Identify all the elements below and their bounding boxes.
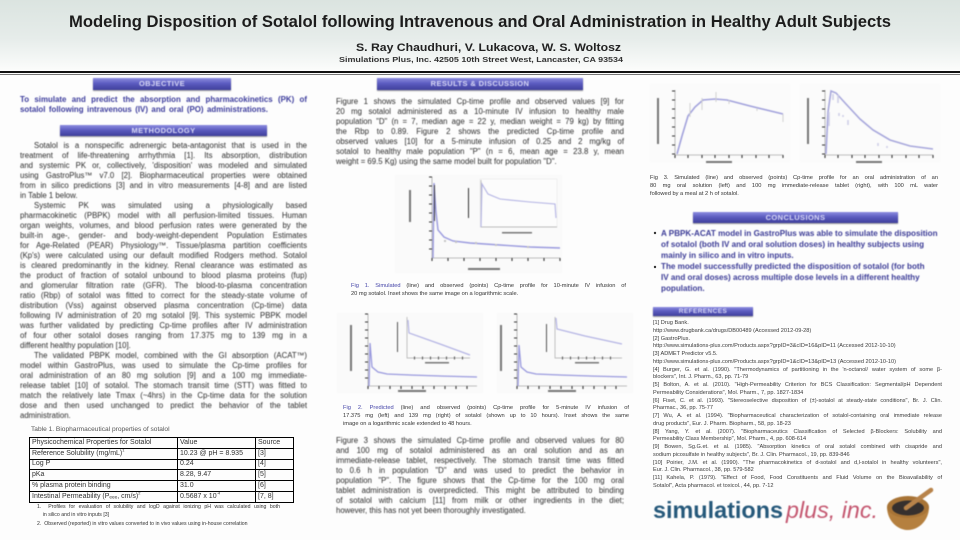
results text 1: population "D" (n = 7, median age = 22 y, median weight = 79 kg) by fitting <box>336 117 624 126</box>
heading: results and discussion: RESULTS & DISCUSSION <box>431 79 529 88</box>
table: physicochemical properties: % plasma protein binding <box>32 482 111 489</box>
methodology text: of four other sotalol doses ranging from 17.375 mg to 139 mg in a <box>20 331 307 340</box>
references list: [11] Kahela, P. (1979). "Effect of Food, Food Constituents and Fluid Volume on the Bioavailability of <box>653 475 942 481</box>
references list: [2] GastroPlus. <box>653 336 690 342</box>
figure 3 caption: followed by a meal at 2 h of sotalol. <box>650 191 739 197</box>
objective text: To simulate and predict the absorption and pharmacokinetics (PK) of <box>20 95 307 104</box>
objective text: sotalol following intravenous (IV) and oral (PO) administrations. <box>20 105 268 114</box>
methodology text: dose and then used unchanged to predict the behavior of the tablet <box>20 401 307 410</box>
references list: http://www.drugbank.ca/drugs/DB00489 (Accessed 2012-09-28) <box>653 328 811 334</box>
figure 1 caption: Fig 1. Simulated (line) and observed (points) Cp-time profile for 10-minute IV infusion of <box>351 283 626 289</box>
references list: [1] Drug Bank. <box>653 320 689 326</box>
references list: [10] Poirier, J.M. et al. (1990). "The pharmacokinetics of d-sotalol and d,l-sotalol in healthy volunteers", <box>653 460 942 466</box>
table: physicochemical properties: Value <box>180 439 197 446</box>
methodology text: organ weights, volumes, and blood perfusion rates were generated by the <box>20 221 307 230</box>
figure 3 caption <box>650 175 938 197</box>
table: physicochemical properties: Source <box>258 439 280 446</box>
methodology text: using GastroPlus™ v7.0 [2]. Biopharmaceutical properties were obtained <box>20 171 307 180</box>
references list: http://www.simulations-plus.com/Products.aspx?grpID=3&cID=16&pID=11 (Accessed 2012-10-10) <box>653 343 896 349</box>
references list: Permeability Class Membership", Mol. Pharm., 4, pp. 608-614 <box>653 436 806 442</box>
methodology text: and glomerular filtration rate (GFR). The blood-to-plasma concentration <box>20 281 307 290</box>
results text 2: tablet administration is overpredicted. This might be attributed to binding <box>336 486 624 495</box>
methodology text: is cleared predominantly in the kidney. Renal clearance was estimated as <box>20 261 307 270</box>
table: physicochemical properties: 31.0 <box>180 482 194 489</box>
results text 1: observed values [10] for a 5-minute infusion of 0.25 and 2 mg/kg of <box>336 137 624 146</box>
methodology text: Sotalol is a nonspecific adrenergic beta-antagonist that is used in the <box>34 141 307 150</box>
table caption: Table 1. Biopharmaceutical properties of sotalol <box>31 426 170 433</box>
methodology text: from in silico predictions [3] and in vitro measurements [4-8] and are listed <box>20 181 307 190</box>
figure 2 caption: Fig 2. Predicted (line) and observed (points) Cp-time profile for 5-minute IV infusion of <box>343 405 629 411</box>
references list: Permeability Considerations", Mol. Pharm., 7, pp. 1827-1834 <box>653 390 803 396</box>
results text 2: population "P". The figure shows that the Cp-time for the 100 mg oral <box>336 476 624 485</box>
results text 2 <box>336 436 624 516</box>
heading: objective <box>93 78 231 90</box>
heading: objective: OBJECTIVE <box>139 79 185 88</box>
table: physicochemical properties <box>29 437 294 503</box>
methodology text <box>19 141 308 420</box>
figure 3 caption: 80 mg oral solution (left) and 100 mg immediate-release tablet (right), with 100 mL water <box>650 183 938 189</box>
methodology text: model within GastroPlus, was used to simulate the Cp-time profiles for <box>20 361 307 370</box>
conclusions bullets: of sotalol (both IV and oral solution doses) in healthy subjects using <box>661 240 924 249</box>
references list: sodium picosulfate in healthy subjects", Br. J. Clin. Pharmacol., 19, pp. 839-846 <box>653 452 850 458</box>
header text <box>69 13 891 64</box>
references list: [7] Wu, A. et al. (1994). "Biopharmaceutical characterization of sotalol-containing oral immediate release <box>653 413 942 419</box>
heading: references: REFERENCES <box>679 308 727 315</box>
conclusions bullets: The model successfully predicted the disposition of sotalol (for both <box>661 262 925 271</box>
references list: Eur. J. Clin. Pharmacol., 38, pp. 579-582 <box>653 467 754 473</box>
references list: [9] Bowen, Sg.G.et. et al. (1985). "Absorption kinetics of oral sotalol combined with cisapride and <box>653 444 942 450</box>
table: physicochemical properties: [6] <box>258 482 266 489</box>
conclusions bullets: population. <box>661 284 705 293</box>
methodology text: treatment of life-threatening arrhythmia [1]. Its absorption, distribution <box>20 151 307 160</box>
methodology text: in Table 1 below. <box>20 191 78 200</box>
results text 1: weight = 69.5 Kg) using the same model built for population "D". <box>336 157 557 166</box>
references list: Pharmac., 36, pp. 75-77 <box>653 405 713 411</box>
heading: references <box>653 307 753 316</box>
methodology text: ratio (Rbp) of sotalol was fitted to correct for the steady-state volume of <box>20 291 307 300</box>
heading: conclusions: CONCLUSIONS <box>766 213 825 222</box>
results text 1: the Rbp to 0.89. Figure 2 shows the predicted Cp-time profile and <box>336 127 624 136</box>
figure 3 caption: Fig 3. Simulated (line) and observed (points) Cp-time profile for an oral administration of an <box>650 175 938 181</box>
table: physicochemical properties: Physicochemical Properties for Sotalol <box>32 439 151 446</box>
figure 2 caption <box>343 405 629 427</box>
table: physicochemical properties: [3] <box>258 450 266 457</box>
results text 1: sotalol to healthy male population "P" (n = 6, mean age = 23.8 y, mean <box>336 147 624 156</box>
conclusions bullets: IV and oral doses) across multiple dose levels in a different healthy <box>661 273 920 282</box>
icon: mortar and pestle <box>887 490 931 530</box>
table: physicochemical properties: [7, 8] <box>258 493 274 500</box>
references list <box>653 320 942 489</box>
references list: [6] Fiset, C. et al. (1993). "Stereoselective disposition of (±)-sotalol at steady-state conditions", Br. J. Clin. <box>653 398 942 404</box>
references list: [5] Bolton, A. et al. (2010). "High-Permeability Criterion for BCS Classification: Segmental/pH Dependent <box>653 382 942 388</box>
references list: http://www.simulations-plus.com/Products.aspx?grpID=1&cID=13&pID=13 (Accessed 2012-10-10) <box>653 359 896 365</box>
figure 1 caption <box>351 283 626 297</box>
methodology text: was further validated by predicting Cp-time profiles after IV administration <box>20 321 307 330</box>
references list: Sotalol", Acta pharmacol. et toxicol., 44, pp. 7-12 <box>653 483 773 489</box>
header band <box>0 0 960 70</box>
heading: methodology: METHODOLOGY <box>132 126 195 135</box>
heading: results and discussion <box>377 78 583 90</box>
header rule <box>0 71 960 75</box>
references list: [3] ADMET Predictor v5.5. <box>653 351 718 357</box>
heading: methodology <box>60 125 267 136</box>
table: physicochemical properties: pKa <box>32 471 44 478</box>
affiliation: Simulations Plus, Inc. 42505 10th Street West, Lancaster, CA 93534 <box>339 55 623 64</box>
table: physicochemical properties: [5] <box>258 471 266 478</box>
figure 1 caption: 20 mg sotalol. Inset shows the same image on a logarithmic scale. <box>351 291 518 297</box>
objective text <box>20 95 308 114</box>
references list: [4] Burger, G. et al. (1990). "Thermodynamics of partitioning in the 'n-octanol/ water system of some β- <box>653 366 942 372</box>
methodology text: administration. <box>20 411 71 420</box>
references list: drug products", Eur. J. Pharm. Biopharm., 58, pp. 18-23 <box>653 421 791 427</box>
results text 2: to 0.6 h in population "D" and was used to predict the behavior in <box>336 466 624 475</box>
methodology text: built-in age-, gender- and body-weight-dependent Population Estimates <box>20 231 307 240</box>
results text 1: 20 mg sotalol administered as a 10-minute IV infusion to healthy male <box>336 107 624 116</box>
results text 1: Figure 1 shows the simulated Cp-time profile and observed values [9] for <box>336 97 624 106</box>
table footnotes: 1. Profiles for evaluation of solubility and logD against ionizing pH was calculated using both <box>37 504 280 510</box>
table: physicochemical properties: 8.28, 9.47 <box>180 471 211 478</box>
methodology text: the product of fraction of sotalol unbound to blood plasma proteins (fup) <box>20 271 307 280</box>
authors: S. Ray Chaudhuri, V. Lukacova, W. S. Woltosz <box>356 42 622 54</box>
methodology text: match the relatively late Tmax (~4hrs) in the Cp-time data for the solution <box>20 391 307 400</box>
methodology text: release tablet [10] of sotalol. The stomach transit time (STT) was fitted to <box>20 381 307 390</box>
table: physicochemical properties: Log P <box>32 460 50 467</box>
figure 2 caption: image on a logarithmic scale extended to 48 hours. <box>343 421 472 427</box>
methodology text: for Age-Related (PEAR) Physiology™. Tissue/plasma partition coefficients <box>20 241 307 250</box>
methodology text: (Kp's) were calculated using our default modified Rodgers method. Sotalol <box>20 251 307 260</box>
conclusions bullets <box>660 229 938 294</box>
methodology text: following IV administration of 20 mg sotalol [9]. This systemic PBPK model <box>20 311 307 320</box>
methodology text: pharmacokinetic (PBPK) model with all perfusion-limited tissues. Human <box>20 211 307 220</box>
table footnotes <box>37 504 280 527</box>
methodology text: The validated PBPK model, combined with the GI absorption (ACAT™) <box>34 351 307 360</box>
results text 2: and 100 mg of sotalol administered as an oral solution and as an <box>336 446 624 455</box>
conclusions bullets: A PBPK-ACAT model in GastroPlus was able to simulate the disposition <box>661 229 938 238</box>
logo: simulations plus: plus, inc. <box>785 497 878 523</box>
results text 2: immediate-release tablet, respectively. The stomach transit time was fitted <box>336 456 624 465</box>
methodology text: Systemic PK was simulated using a physiologically based <box>34 201 307 210</box>
table: physicochemical properties: [4] <box>258 460 266 467</box>
references list: blockers", Int. J. Pharm., 63, pp. 71-79 <box>653 374 748 380</box>
table footnotes: 2. Observed (reported) in vitro values converted to in vivo values using in-house correlation <box>37 521 248 527</box>
conclusions bullets: mainly in silico and in vitro inputs. <box>661 251 794 260</box>
references list: [8] Yang, Y. et al. (2007). "Biopharmaceutics Classification of Selected β-Blockers: Solubility and <box>653 428 942 434</box>
results text 2: Figure 3 shows the simulated Cp-time profile and observed values for 80 <box>336 436 624 445</box>
results text 2: of sotalol with calcium [11] from milk or other ingredients in the diet; <box>336 496 624 505</box>
table: physicochemical properties: 10.23 @ pH = 8.935 <box>180 450 243 457</box>
results text 2: however, this has not yet been thoroughly investigated. <box>336 506 526 515</box>
methodology text: and systemic PK or, collectively, 'disposition' was modeled and simulated <box>20 161 307 170</box>
methodology text: oral administration of an 80 mg solution [9] and a 100 mg immediate- <box>20 371 307 380</box>
heading: conclusions <box>693 212 898 223</box>
title: Modeling Disposition of Sotalol following Intravenous and Oral Administration in Healthy Adult Subjects <box>69 13 891 31</box>
table: physicochemical properties: 0.24 <box>180 460 194 467</box>
figure 2 caption: 17.375 mg (left) and 139 mg (right) of sotalol (shown up to 10 hours). Inset shows the same <box>343 413 629 419</box>
methodology text: distribution (Vss) against observed plasma concentration (Cp-time) data <box>20 301 307 310</box>
table footnotes: in silico and in vitro inputs [3] <box>43 512 109 518</box>
results text 1 <box>335 97 625 166</box>
methodology text: different healthy population [10]. <box>20 341 131 350</box>
logo: simulations plus: simulations <box>653 497 783 523</box>
